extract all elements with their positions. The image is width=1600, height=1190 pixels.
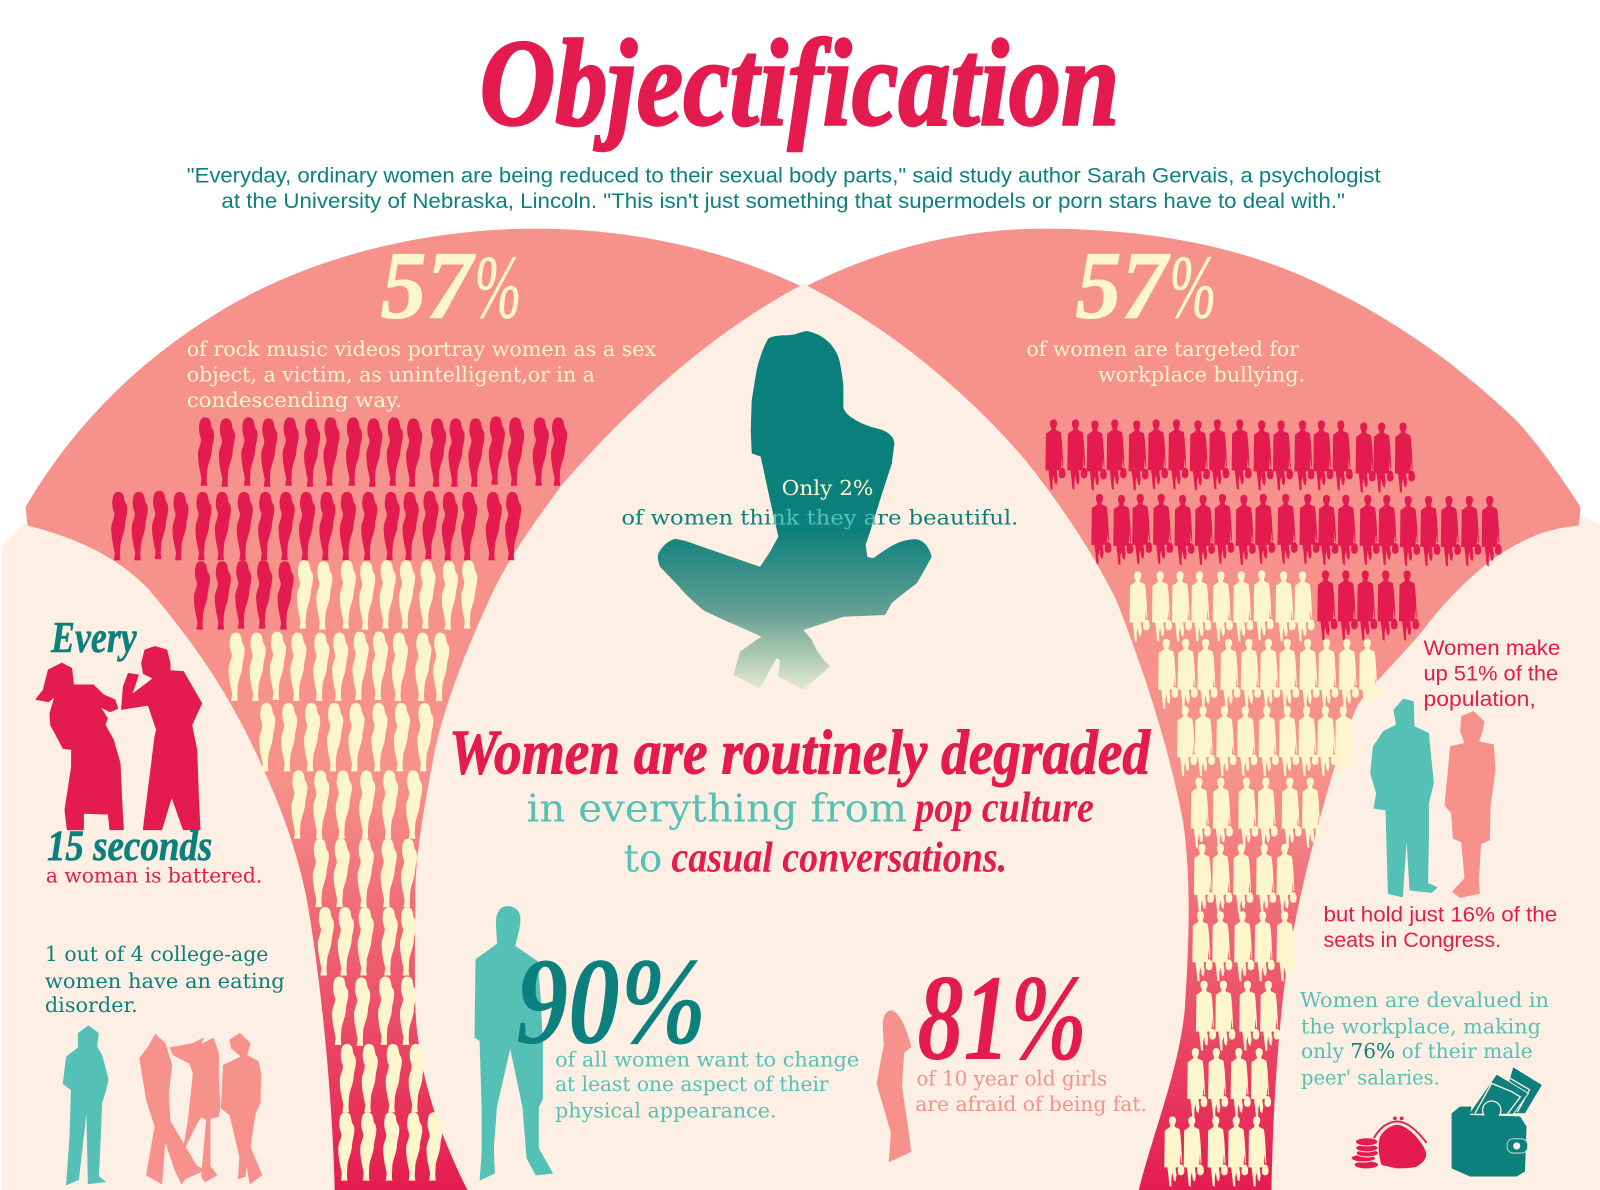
- icon: man silhouette: [474, 906, 553, 1181]
- icon: arguing couple: [36, 647, 202, 830]
- icon: purse and coins: [1351, 1117, 1427, 1169]
- icon: teal woman: [63, 1026, 108, 1185]
- stat: 90%: of all women want to change: [555, 1047, 859, 1071]
- panel: left arch and funnel: [26, 229, 800, 1190]
- title: Objectification: [480, 13, 1119, 151]
- icon: man and woman silhouettes: [1371, 699, 1495, 897]
- stat: every 15 seconds: 15 seconds: [47, 823, 212, 870]
- icon: girl silhouette: [877, 1010, 911, 1162]
- pictogram: left funnel of women: [111, 416, 567, 1181]
- stat: 57% rock music videos: %: [474, 238, 521, 337]
- heading: women are routinely degraded: pop culture: [912, 784, 1094, 831]
- icon: wallet with banknotes: [1452, 1067, 1542, 1177]
- heading: women are routinely degraded: in everything from: [527, 786, 907, 831]
- stat: 81%: 81%: [917, 951, 1087, 1086]
- stat: 51% of population: population,: [1423, 687, 1536, 711]
- stat: only 2%: of women thi nk they a re beautiful.: [621, 505, 1018, 529]
- heading: women are routinely degraded: Women are routinely degraded: [449, 717, 1151, 787]
- panel: right arch and funnel: [807, 229, 1581, 1190]
- red figures: [1045, 419, 1502, 641]
- icon: seated woman silhouette: [658, 331, 932, 690]
- stat: 90%: physical appearance.: [555, 1098, 777, 1122]
- stat: eating disorder: disorder.: [45, 993, 138, 1017]
- stat: only 2%: Only 2%: [782, 476, 873, 500]
- background: peach ground: [2, 284, 1600, 1190]
- stat: 16% of seats in Congress: but hold just 16% of the: [1323, 902, 1557, 926]
- stat: 57% rock music videos: of rock music videos portray women as a sex: [187, 337, 657, 361]
- stat: 76% of male salaries: peer' salaries.: [1301, 1066, 1440, 1090]
- stat: every 15 seconds: [46, 612, 262, 888]
- stat: 76% of male salaries: only 76% of their male: [1301, 1039, 1533, 1063]
- stat: eating disorder: 1 out of 4 college-age: [45, 942, 268, 966]
- stat: 57% workplace bullying: [1027, 232, 1305, 387]
- stat: 57% rock music videos: condescending way.: [187, 388, 402, 412]
- stat: every 15 seconds: a woman is battered.: [46, 864, 262, 888]
- subtitle quote: at the University of Nebraska, Lincoln. "This isn't just something that supermodels or porn stars have to deal with.": [221, 189, 1345, 213]
- stat: 51% of population: [1423, 636, 1560, 711]
- stat: 81%: of 10 year old girls: [916, 1067, 1107, 1091]
- stat: 57% workplace bullying: %: [1169, 238, 1216, 337]
- heading: women are routinely degraded: casual conversations.: [671, 834, 1007, 881]
- stat: 51% of population: Women make: [1423, 636, 1560, 660]
- stat: 51% of population: up 51% of the: [1423, 662, 1558, 686]
- heading: women are routinely degraded: to: [623, 836, 662, 881]
- stat: 90%: at least one aspect of their: [555, 1072, 829, 1096]
- stat: eating disorder: women have an eating: [45, 969, 285, 993]
- stat: 76% of male salaries: [1300, 988, 1549, 1090]
- stat: 57% rock music videos: [187, 232, 657, 412]
- stat: 90%: 90%: [516, 932, 706, 1070]
- heading: women are routinely degraded: [449, 717, 1151, 881]
- stat: every 15 seconds: Every: [50, 612, 138, 662]
- stat: 76% of male salaries: Women are devalued in: [1300, 988, 1549, 1012]
- stat: 16% of seats in Congress: seats in Congress.: [1323, 928, 1501, 952]
- stat: eating disorder: [45, 942, 285, 1017]
- red figures: [111, 416, 567, 630]
- stat: 57% rock music videos: object, a victim, as unintelligent,or in a: [187, 363, 595, 387]
- subtitle quote: [187, 164, 1381, 213]
- cream figures: [229, 560, 477, 1181]
- subtitle quote: "Everyday, ordinary women are being reduced to their sexual body parts," said study author Sarah Gervais, a psychologist: [187, 164, 1381, 188]
- icon: group of three women: [140, 1034, 262, 1184]
- stat: 16% of seats in Congress: [1323, 902, 1557, 952]
- stat: 57% workplace bullying: of women are targeted for: [1027, 337, 1299, 361]
- stat: 76% of male salaries: the workplace, making: [1301, 1015, 1541, 1039]
- stat: 90%: [516, 932, 859, 1122]
- stat: only 2%: [621, 476, 1018, 529]
- stat: 57% workplace bullying: workplace bullying.: [1098, 363, 1305, 387]
- stat: 57% workplace bullying: 57: [1076, 232, 1171, 338]
- pictogram: right funnel of women with bags: [1045, 419, 1502, 1187]
- stat: 57% rock music videos: 57: [381, 232, 476, 338]
- stat: 81%: are afraid of being fat.: [915, 1092, 1147, 1116]
- cream figures: [1130, 570, 1379, 1187]
